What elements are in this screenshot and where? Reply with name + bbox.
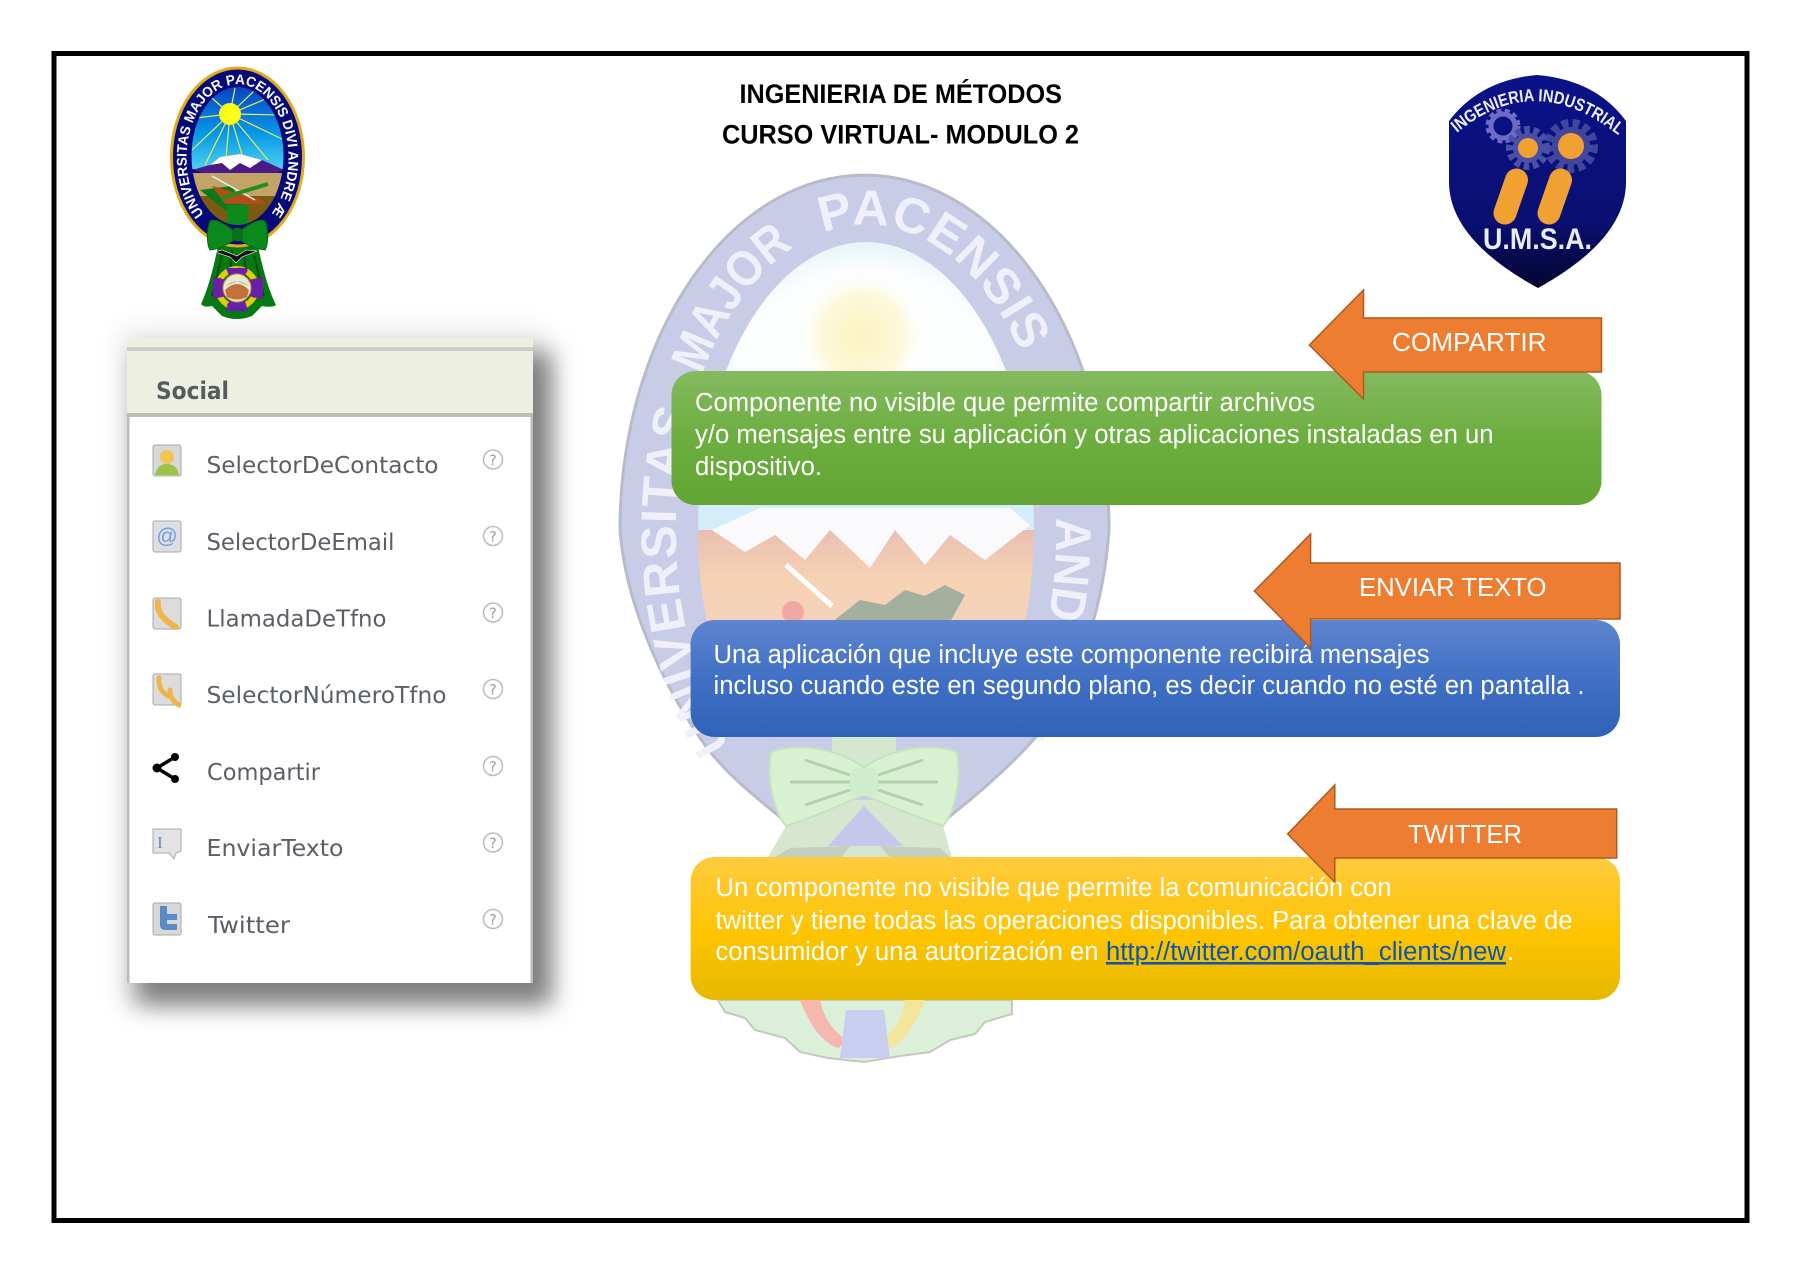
arrow: twitter: TWITTER <box>1408 819 1522 849</box>
watermark ring lettering: MAJOR <box>671 225 793 371</box>
item: SelectorDeEmail: ? <box>489 530 497 546</box>
item: SelectorDeContacto: SelectorDeContacto <box>206 453 438 479</box>
item: Twitter <box>153 903 502 939</box>
text: twitter description: twitter y tiene todas las operaciones disponibles. Para obtener una clave de <box>716 907 1572 935</box>
watermark ring lettering: AND <box>1051 519 1090 620</box>
item: Compartir: ? <box>489 760 497 776</box>
watermark scene <box>690 235 1040 630</box>
item: Compartir <box>152 753 502 786</box>
watermark ring lettering: UNIVERSITAS <box>641 408 725 758</box>
arrow: compartir: COMPARTIR <box>1392 327 1546 357</box>
text: twitter description: http://twitter.com/oauth_clients/new <box>1106 938 1507 966</box>
item: SelectorNúmeroTfno <box>153 674 502 709</box>
text: enviar texto description: Una aplicación que incluye este componente recibirá mensajes <box>714 641 1430 669</box>
text: enviar texto description: incluso cuando este en segundo plano, es decir cuando no esté en pantalla . <box>714 672 1584 700</box>
seal bow <box>207 220 268 250</box>
arrow: enviar texto <box>1254 534 1620 648</box>
watermark ring lettering: DIVI <box>1025 380 1100 491</box>
title <box>722 78 1079 150</box>
item: LlamadaDeTfno: LlamadaDeTfno <box>206 606 386 632</box>
panel shadow <box>118 326 546 1006</box>
title: CURSO VIRTUAL- MODULO 2 <box>722 120 1079 150</box>
watermark: university seal <box>618 174 1110 1063</box>
item: SelectorDeEmail: SelectorDeEmail <box>206 530 394 556</box>
item: Compartir: Compartir <box>207 760 321 786</box>
seal drape and medal <box>201 246 276 319</box>
panel: social palette <box>118 326 552 1006</box>
text: compartir description: dispositivo. <box>695 453 822 481</box>
item: SelectorDeContacto <box>153 445 502 479</box>
panel: compartir description <box>672 371 1602 505</box>
text: twitter description: Un componente no visible que permite la comunicación con <box>716 874 1392 902</box>
item: LlamadaDeTfno: ? <box>489 606 497 622</box>
watermark drape top <box>768 800 952 857</box>
icon: pills <box>1505 180 1560 213</box>
text: twitter description: . <box>1507 938 1514 966</box>
logo: Universidad Mayor de San Andrés seal <box>170 66 305 319</box>
text: compartir description <box>695 389 1494 481</box>
item: EnviarTexto <box>153 829 502 862</box>
text: enviar texto description <box>714 641 1584 700</box>
text: compartir description: Componente no visible que permite compartir archivos <box>695 389 1315 417</box>
watermark drape bottom <box>718 1000 1012 1062</box>
panel: twitter description <box>691 857 1620 1000</box>
arrow: twitter <box>1288 785 1617 882</box>
arrow: compartir <box>1309 290 1602 399</box>
text: compartir description: y/o mensajes entre su aplicación y otras aplicaciones instaladas en un <box>695 421 1494 449</box>
shield label: U.M.S.A. <box>1483 223 1592 256</box>
watermark medal <box>800 1000 846 1048</box>
item: Twitter: Twitter <box>207 913 291 939</box>
panel header <box>127 338 533 417</box>
seal ring lettering: UNIVERSITAS MAJOR PACENSIS DIVI ANDRE Æ <box>176 74 298 219</box>
watermark ring lettering <box>641 190 1090 758</box>
seal oval <box>172 68 304 246</box>
panel header: Social <box>156 377 229 405</box>
icon: gears <box>1489 112 1593 168</box>
logo: Ingeniería Industrial shield <box>1449 75 1626 288</box>
watermark bow <box>769 737 959 857</box>
item: EnviarTexto: EnviarTexto <box>206 836 344 862</box>
text: twitter description <box>716 874 1572 966</box>
seal inner scene <box>190 85 286 230</box>
item: EnviarTexto: ? <box>489 836 497 852</box>
item: SelectorNúmeroTfno: ? <box>489 682 497 698</box>
item: LlamadaDeTfno <box>153 598 502 632</box>
item: SelectorDeEmail: @ <box>156 525 178 548</box>
watermark oval ring <box>620 175 1109 822</box>
item: EnviarTexto: I <box>157 833 163 852</box>
watermark ring lettering: PACENSIS <box>818 190 1048 348</box>
item: SelectorDeContacto: ? <box>489 453 497 469</box>
panel: enviar texto description <box>691 620 1620 737</box>
text: twitter description: consumidor y una autorización en <box>716 938 1098 966</box>
title: INGENIERIA DE MÉTODOS <box>740 78 1062 109</box>
item: SelectorDeEmail <box>153 521 502 556</box>
watermark ring lettering: RE <box>1038 737 1044 740</box>
shield arc lettering: INGENIERIA INDUSTRIAL <box>1450 89 1622 135</box>
arrow: enviar texto: ENVIAR TEXTO <box>1359 572 1546 602</box>
item: SelectorNúmeroTfno: SelectorNúmeroTfno <box>206 683 446 709</box>
item: Twitter: ? <box>489 912 497 928</box>
